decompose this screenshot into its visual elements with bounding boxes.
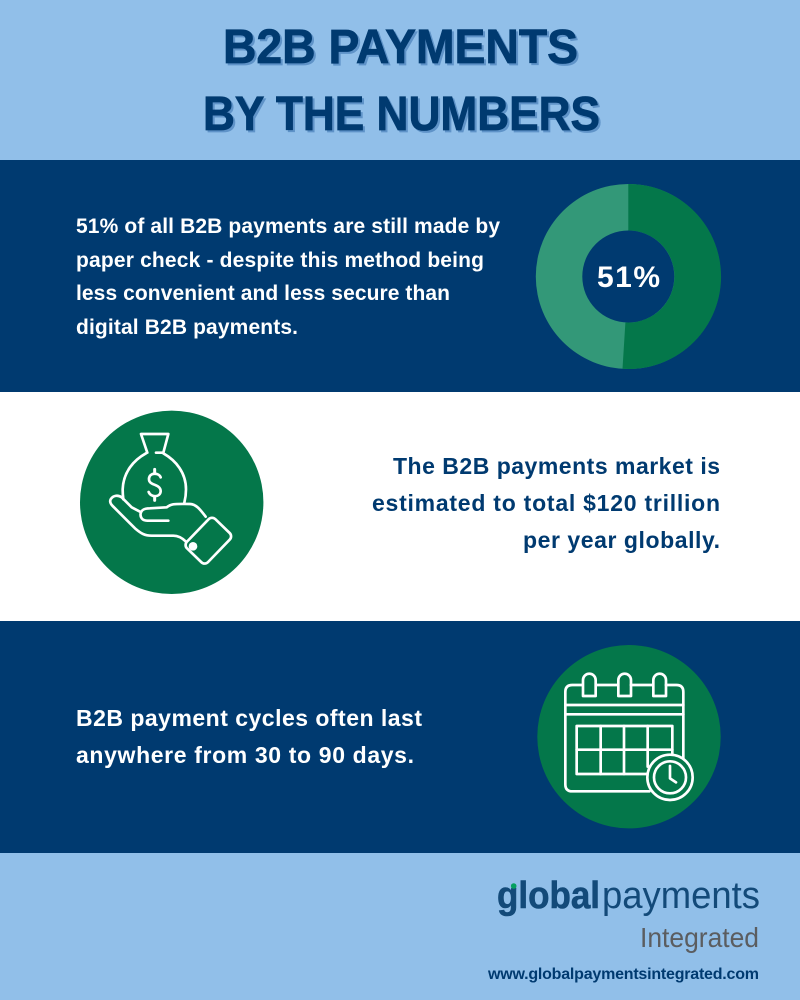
title: BY THE NUMBERS	[205, 90, 602, 143]
panel: market size statistic	[0, 392, 800, 621]
icon: calendar with clock	[537, 645, 721, 828]
website url: www.globalpaymentsintegrated.com	[487, 966, 759, 983]
title: B2B PAYMENTS	[223, 21, 578, 74]
panel: footer	[0, 853, 800, 1000]
panel: header	[0, 0, 800, 160]
logo: global payments integrated: global	[497, 875, 600, 917]
icon: hand holding money bag	[80, 411, 263, 594]
text block: market size: The B2B payments market is	[393, 453, 720, 479]
title: BY THE NUMBERS	[203, 88, 600, 141]
panel: paper check statistic	[0, 160, 800, 392]
text block: payment cycles: anywhere from 30 to 90 days.	[76, 742, 414, 768]
text block: paper check	[76, 215, 500, 339]
logo: global payments integrated: payments	[602, 875, 760, 917]
text block: payment cycles	[76, 705, 422, 768]
logo: global payments integrated	[497, 875, 760, 953]
title	[203, 21, 602, 143]
logo: global payments integrated: Integrated	[640, 922, 759, 953]
text block: paper check: digital B2B payments.	[76, 316, 298, 339]
text block: paper check: 51% of all B2B payments are still made by	[76, 215, 500, 238]
panel: payment cycles statistic	[0, 621, 800, 853]
text block: market size	[372, 453, 720, 553]
title: B2B PAYMENTS	[225, 23, 580, 76]
text block: market size: estimated to total $120 trillion	[372, 490, 720, 516]
donut chart: 51%: 51%	[597, 261, 660, 294]
text block: paper check: paper check - despite this method being	[76, 249, 484, 272]
text block: market size: per year globally.	[523, 527, 720, 553]
text block: paper check: less convenient and less secure than	[76, 282, 450, 305]
donut chart: 51%	[536, 184, 721, 369]
text block: payment cycles: B2B payment cycles often last	[76, 705, 422, 731]
